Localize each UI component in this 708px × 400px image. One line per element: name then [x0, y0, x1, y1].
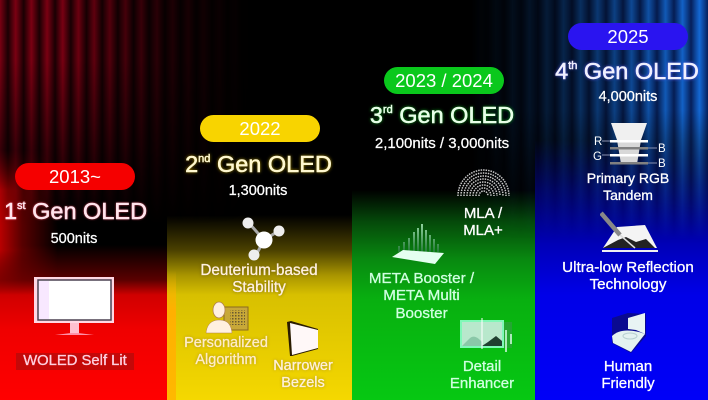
- label: Personalized Algorithm: [184, 335, 269, 368]
- label: Primary RGB Tandem: [587, 170, 669, 203]
- heading: 4th Gen OLED: 4th Gen OLED: [555, 58, 699, 84]
- label: META Booster / META Multi Booster: META Booster /: [369, 270, 474, 287]
- year pill 2013~: 2013~: [49, 166, 101, 187]
- label: Deuterium-based Stability: [200, 262, 318, 297]
- icon: MLA dome: [457, 169, 510, 196]
- background: red left glow: [0, 154, 54, 288]
- heading: 2nd Gen OLED: 2nd Gen OLED: [185, 151, 332, 177]
- heading: 3rd Gen OLED: 3rd Gen OLED: [370, 102, 514, 128]
- background: blue curtain stripes: [490, 0, 708, 229]
- background: yellow column: [167, 0, 352, 400]
- label: META Booster / META Multi Booster: META Multi: [383, 287, 460, 304]
- nits: 2,100nits / 3,000nits: 2,100nits / 3,000nits: [375, 135, 509, 152]
- label: Ultra-low Reflection Technology: Ultra-low Reflection: [562, 259, 694, 276]
- panel: 1st gen: [4, 163, 148, 370]
- label: MLA / MLA+: MLA /: [464, 205, 502, 222]
- icon: primary RGB tandem: [593, 123, 666, 170]
- label: Narrower Bezels: Narrower: [273, 358, 333, 374]
- icon: personalized algorithm: [206, 302, 248, 334]
- label: Human Friendly: Human: [604, 358, 652, 375]
- label: Personalized Algorithm: Personalized: [184, 335, 268, 351]
- label patch and text: WOLED Self Lit: WOLED Self Lit: [23, 353, 127, 369]
- year pill 2022: 2022: [239, 118, 281, 139]
- label: MLA / MLA+: MLA+: [463, 222, 503, 239]
- nits: 500nits: 500nits: [51, 231, 97, 247]
- nits: 1,300nits: 1,300nits: [229, 183, 287, 199]
- label: Deuterium-based Stability: Stability: [232, 279, 286, 296]
- label: Ultra-low Reflection Technology: [562, 259, 694, 293]
- year pill 2025: 2025: [607, 26, 649, 47]
- label: META Booster / META Multi Booster: Booster: [395, 305, 448, 322]
- year pill 2025: [568, 23, 688, 50]
- icon: primary RGB tandem: R: [594, 136, 602, 148]
- icon: ultra-low reflection: [600, 212, 658, 252]
- heading: 1st Gen OLED: 1st Gen OLED: [4, 198, 147, 224]
- label: Personalized Algorithm: Algorithm: [195, 352, 257, 368]
- label: Narrower Bezels: [272, 358, 333, 391]
- background: green column: [352, 0, 535, 400]
- icon: molecule: [242, 218, 284, 260]
- label: Human Friendly: Friendly: [601, 375, 655, 392]
- label: META Booster / META Multi Booster: [369, 270, 474, 322]
- label: Human Friendly: [601, 358, 655, 392]
- panel: 4th gen: [554, 23, 700, 392]
- label: Primary RGB Tandem: Tandem: [603, 187, 653, 203]
- icon: primary RGB tandem: B: [658, 143, 666, 155]
- label: Detail Enhancer: Enhancer: [450, 375, 514, 392]
- label: Narrower Bezels: Bezels: [281, 375, 325, 391]
- year pill 2022: [200, 115, 320, 142]
- background: red curtain stripes: [0, 0, 222, 215]
- label: Deuterium-based Stability: Deuterium-based: [200, 262, 318, 279]
- label: Detail Enhancer: [450, 358, 514, 392]
- background: blue column: [535, 0, 708, 400]
- icon: META booster: [392, 224, 444, 264]
- icon: primary RGB tandem: G: [593, 151, 602, 163]
- icon: monitor: [34, 277, 114, 335]
- background: red column: [0, 0, 168, 400]
- label: Primary RGB Tandem: Primary RGB: [587, 170, 669, 186]
- icon: primary RGB tandem: B: [658, 158, 666, 170]
- nits: 4,000nits: 4,000nits: [599, 89, 657, 105]
- label: MLA / MLA+: [463, 205, 503, 239]
- background: orange seam: [167, 270, 176, 400]
- icon: human friendly: [612, 313, 646, 353]
- label: Detail Enhancer: Detail: [463, 358, 501, 375]
- icon: narrower bezels: [287, 321, 318, 356]
- year pill 2013~: [15, 163, 135, 190]
- year pill 2023 / 2024: 2023 / 2024: [395, 70, 493, 91]
- icon: detail enhancer: [460, 318, 512, 352]
- year pill 2023 / 2024: [384, 67, 504, 94]
- panel: 3rd gen: [369, 67, 516, 392]
- panel: 2nd gen: [184, 115, 334, 391]
- label: Ultra-low Reflection Technology: Technology: [590, 276, 666, 293]
